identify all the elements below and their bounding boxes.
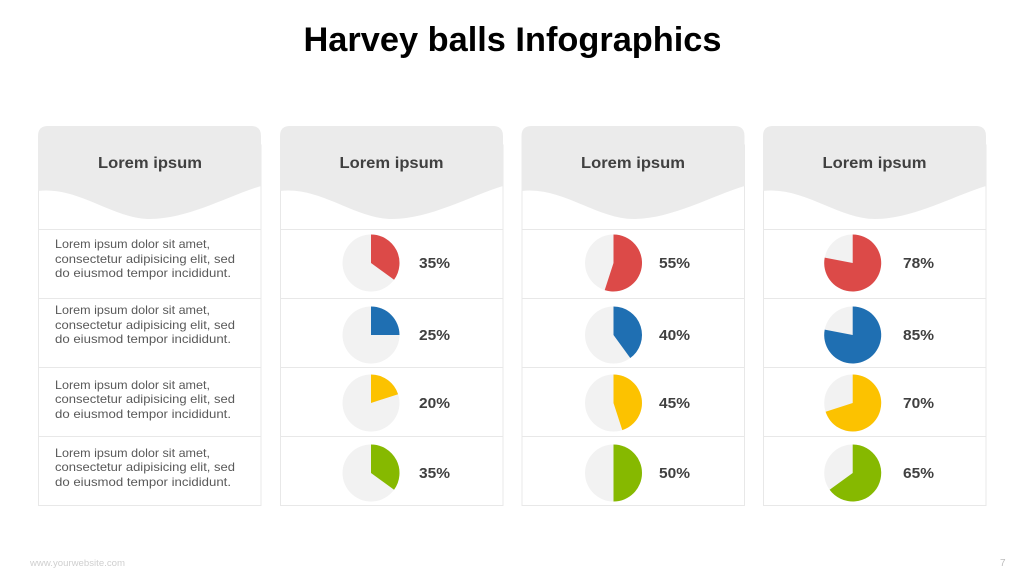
row dividers: [522, 230, 744, 436]
panel: column 3: [522, 126, 744, 506]
value: 50%: 50%: [659, 465, 690, 482]
text block: row 4: consectetur adipisicing elit, sed: [55, 460, 235, 474]
text block: row 4: do eiusmod tempor incididunt.: [55, 475, 231, 489]
harvey ball: 25% blue: [342, 306, 400, 364]
card frame: [764, 145, 986, 506]
card frame: [280, 145, 503, 506]
text block: row 1: consectetur adipisicing elit, sed: [55, 252, 235, 266]
page number: 7: [1000, 558, 1006, 569]
header wave: [522, 126, 744, 219]
value: 20%: 20%: [419, 395, 450, 412]
footer website: www.yourwebsite.com: [29, 558, 125, 569]
harvey ball: 78% red: [824, 234, 881, 292]
title: Harvey balls Infographics: [304, 21, 722, 59]
text block: row 3: do eiusmod tempor incididunt.: [55, 407, 231, 421]
harvey ball: 85% blue: [824, 306, 881, 364]
value: 70%: 70%: [903, 395, 934, 412]
header wave: [763, 126, 986, 219]
text block: row 4: Lorem ipsum dolor sit amet,: [55, 446, 210, 460]
row dividers: [763, 230, 986, 436]
value: 55%: 55%: [659, 255, 690, 272]
harvey ball: 35% green: [342, 444, 400, 502]
text block: row 2: consectetur adipisicing elit, sed: [55, 318, 235, 332]
heading: Lorem ipsum: [822, 155, 926, 172]
value: 65%: 65%: [903, 465, 934, 482]
panel: column 2: [280, 126, 503, 506]
text block: row 3: consectetur adipisicing elit, sed: [55, 392, 235, 406]
harvey ball: 65% green: [824, 444, 881, 502]
text block: row 2: Lorem ipsum dolor sit amet,: [55, 303, 210, 317]
text block: row 2: do eiusmod tempor incididunt.: [55, 332, 231, 346]
text block: row 3: Lorem ipsum dolor sit amet,: [55, 378, 210, 392]
harvey ball: 35% red: [342, 234, 400, 292]
harvey ball: 55% red: [585, 234, 642, 292]
value: 40%: 40%: [659, 327, 690, 344]
panel: column 4: [763, 126, 986, 506]
text block: row 1: do eiusmod tempor incididunt.: [55, 266, 231, 280]
value: 45%: 45%: [659, 395, 690, 412]
heading: Lorem ipsum: [581, 155, 685, 172]
header wave: [38, 126, 261, 219]
value: 35%: 35%: [419, 465, 450, 482]
harvey ball: 50% green: [585, 444, 642, 502]
card frame: [38, 145, 261, 506]
heading: Lorem ipsum: [98, 155, 202, 172]
harvey ball: 70% yellow: [824, 374, 881, 432]
harvey ball: 40% blue: [585, 306, 642, 364]
row dividers: [280, 230, 503, 436]
value: 35%: 35%: [419, 255, 450, 272]
heading: Lorem ipsum: [340, 155, 444, 172]
header wave: [280, 126, 503, 219]
text block: row 1: Lorem ipsum dolor sit amet,: [55, 237, 210, 251]
row dividers: [38, 230, 261, 436]
panel: description column: [38, 126, 261, 506]
value: 25%: 25%: [419, 327, 450, 344]
harvey ball: 20% yellow: [342, 374, 400, 432]
card frame: [522, 145, 744, 506]
value: 85%: 85%: [903, 327, 934, 344]
harvey ball: 45% yellow: [585, 374, 642, 432]
value: 78%: 78%: [903, 255, 934, 272]
